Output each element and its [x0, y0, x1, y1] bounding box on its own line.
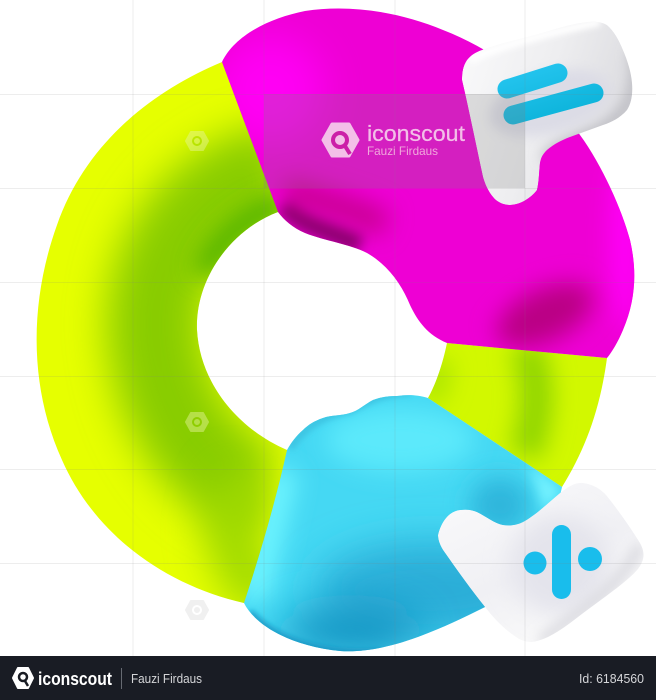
- footer id: Id: 6184560: [579, 671, 644, 686]
- watermark brand: iconscout: [367, 121, 465, 146]
- divide sign bar: [552, 525, 571, 599]
- watermark band: [264, 94, 525, 188]
- bubble line: long: [513, 93, 594, 115]
- footer logo: [13, 668, 33, 688]
- bubble body: [438, 483, 644, 642]
- divide sign dot left: [524, 552, 546, 574]
- footer author: Fauzi Firdaus: [131, 671, 202, 686]
- footer brand: iconscout: [38, 669, 112, 689]
- footer bar: [0, 656, 656, 700]
- watermark hexagon icon: [323, 124, 358, 156]
- bubble body: [462, 22, 636, 205]
- chat bubble top right: [462, 22, 636, 205]
- footer divider: [121, 668, 122, 689]
- chat bubble bottom right: [438, 483, 644, 642]
- faint watermark icon top: [186, 132, 208, 150]
- faint watermark icon bottom: [186, 601, 208, 619]
- watermark author: Fauzi Firdaus: [367, 144, 438, 158]
- segment: lime right: [428, 343, 607, 487]
- watermark logo: [323, 121, 465, 158]
- faint watermark icon middle: [186, 413, 208, 431]
- segment: cyan: [244, 395, 562, 652]
- bubble line: short: [507, 73, 558, 89]
- segment: magenta: [222, 8, 634, 358]
- divide sign dot right: [578, 547, 602, 571]
- segment: lime left: [36, 62, 287, 603]
